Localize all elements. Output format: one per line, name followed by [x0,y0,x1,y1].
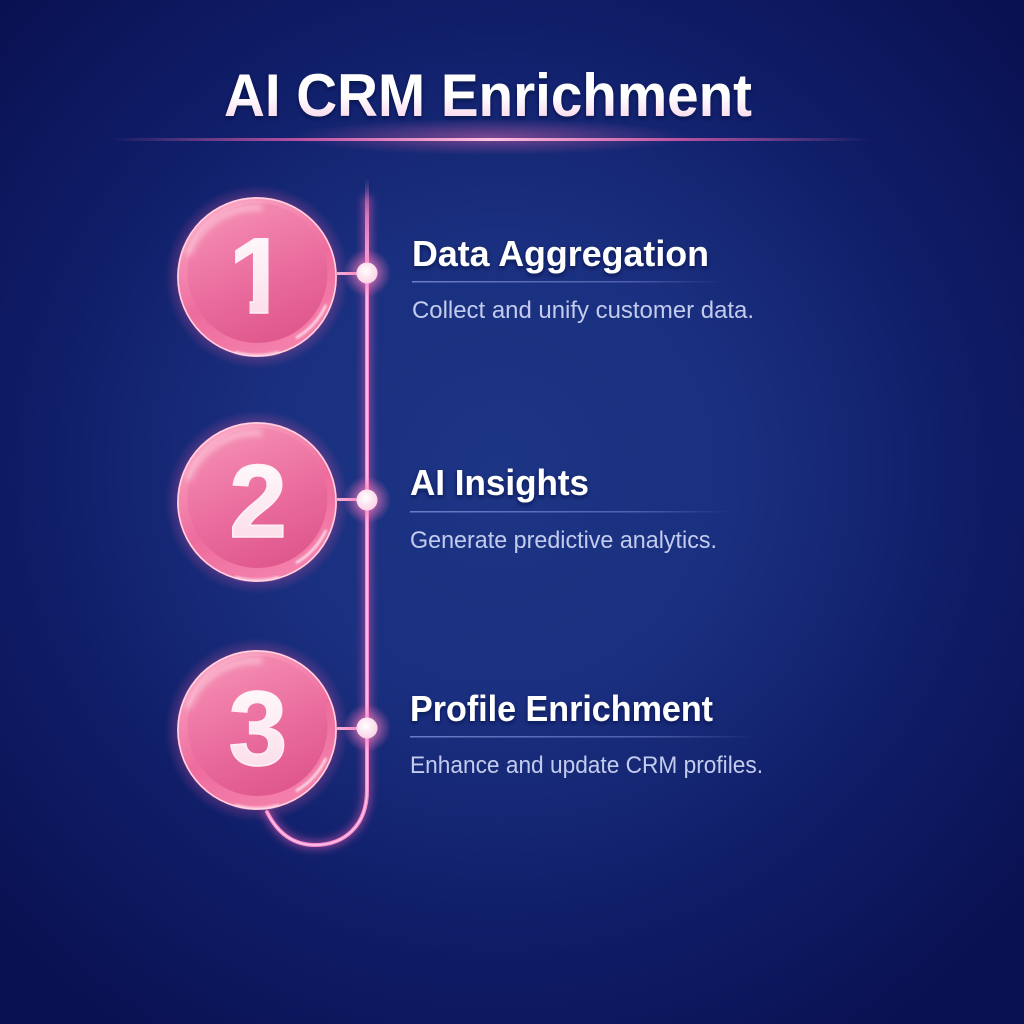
step 2 description: Generate predictive analytics. [410,527,717,554]
step 1 description: Collect and unify customer data. [412,297,754,324]
step 2 divider [410,511,730,512]
step 1 badge [165,185,349,369]
step 3 divider [410,736,755,738]
timeline connector [267,178,369,845]
step 1 badge: 1 [228,215,289,336]
step 2 badge: 2 [229,444,287,560]
step 2 [165,410,730,594]
step 3 description: Enhance and update CRM profiles. [410,752,763,779]
title: AI CRM Enrichment [224,62,752,129]
step 1 connector node [337,249,391,297]
step 1 heading: Data Aggregation [412,233,709,274]
title underline glow [110,119,870,155]
step 2 badge [165,410,349,594]
step 3 connector node [337,704,391,752]
step 2 heading: AI Insights [410,462,589,503]
step 3 [165,638,763,822]
step 1 [165,185,754,369]
step 1 divider [412,281,722,282]
step 2 connector node [337,476,391,524]
step 3 badge: 3 [229,670,287,788]
step 3 heading: Profile Enrichment [410,688,713,729]
step 3 badge [165,638,349,822]
